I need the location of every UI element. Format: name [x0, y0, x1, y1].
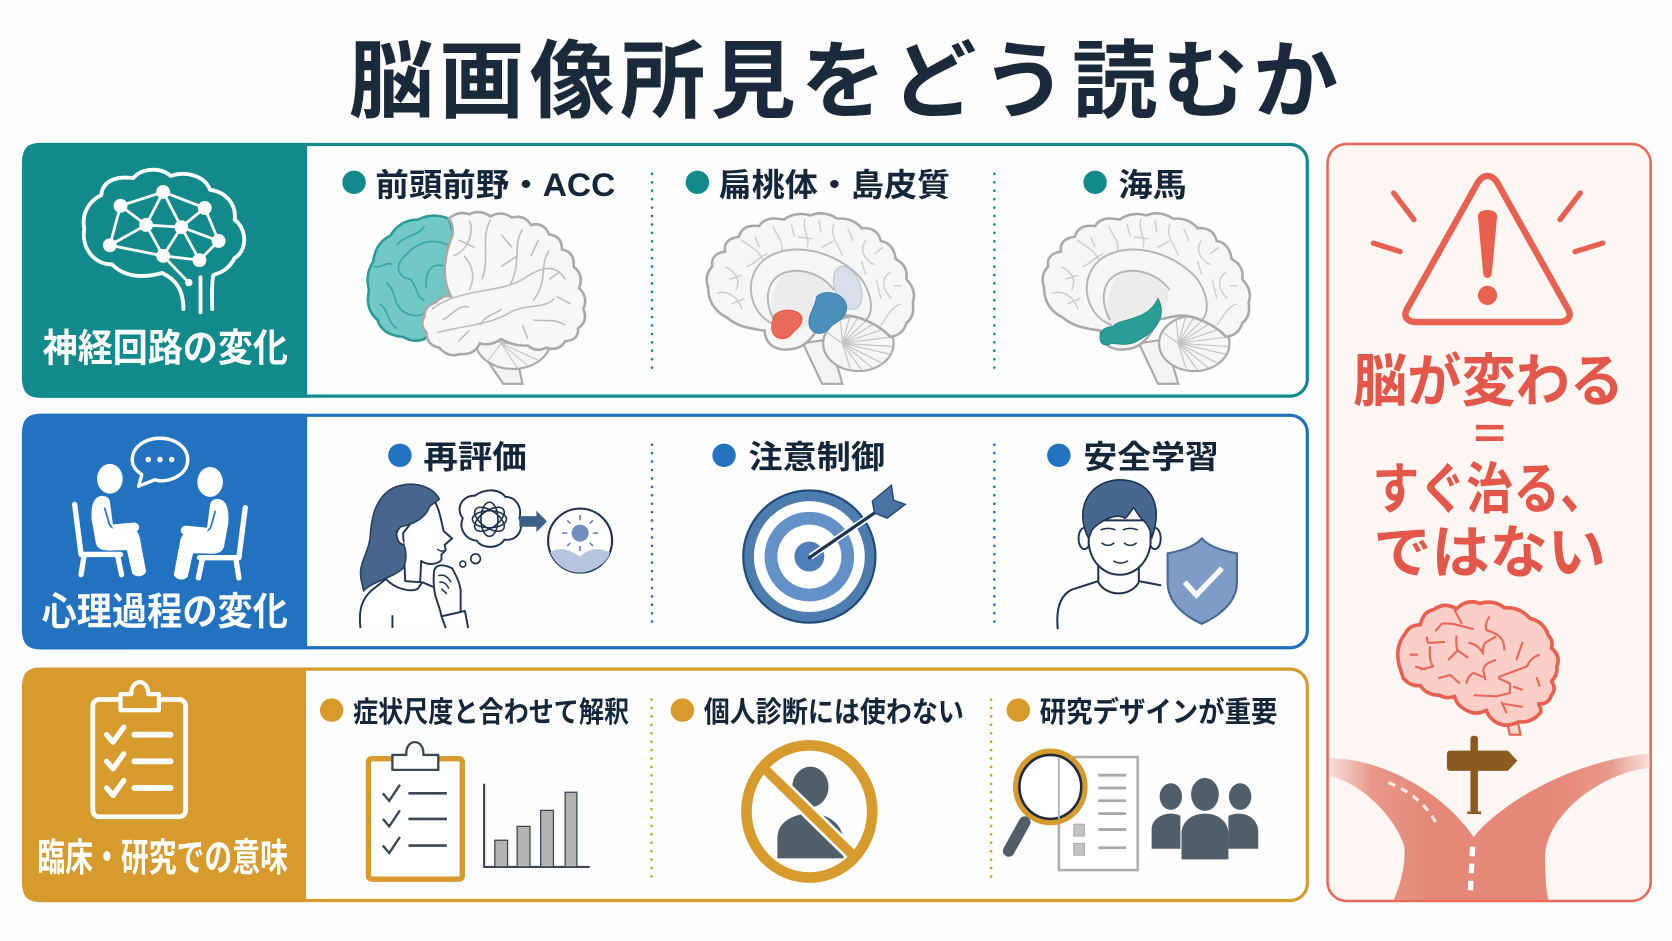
header label: 神経回路の変化: [43, 327, 288, 370]
header label: 心理過程の変化: [42, 591, 288, 634]
divider: [652, 699, 991, 880]
item: 海馬: 海馬: [1119, 167, 1187, 203]
illustration: target and arrow: [743, 485, 905, 623]
item: 研究デザインが重要: [1007, 696, 1277, 870]
item: 症状尺度と合わせて解釈: [320, 697, 629, 879]
item: 前頭前野・ACC: 前頭前野・ACC: [375, 167, 615, 203]
illustration: lateral brain with frontal lobe highlighted: [368, 212, 585, 384]
warning message: 脳が変わる: [1353, 350, 1624, 414]
item: 注意制御: [712, 439, 905, 623]
item: 再評価: 再評価: [423, 439, 527, 475]
item: 扁桃体・島皮質: 扁桃体・島皮質: [719, 167, 950, 203]
illustration: calm person with shield: [1057, 480, 1237, 629]
panel: 心理過程の変化: [22, 414, 1307, 649]
illustration: magnifier over document with group: [1009, 752, 1258, 870]
icon: checklist clipboard: [93, 682, 186, 817]
panel header: 神経回路の変化: [22, 143, 307, 398]
panel header: 臨床・研究での意味: [22, 667, 306, 902]
warning message: =: [1474, 409, 1506, 457]
item: 安全学習: 安全学習: [1083, 439, 1219, 475]
warning message: [1353, 350, 1624, 586]
panel: warning callout: [1328, 144, 1651, 901]
icon: pink brain: [1398, 602, 1558, 735]
illustration: no-person sign: [746, 745, 872, 878]
icon: warning triangle: [1373, 176, 1603, 322]
header label: 臨床・研究での意味: [37, 837, 288, 880]
icon: two people talking: [75, 438, 245, 579]
panel: 神経回路の変化: [22, 143, 1307, 398]
warning message: ではない: [1373, 522, 1606, 586]
icon: signpost: [1447, 736, 1517, 814]
illustration: brain with hippocampus: [1043, 213, 1250, 384]
illustration: clipboard and bar chart: [368, 742, 590, 879]
item: 症状尺度と合わせて解釈: 症状尺度と合わせて解釈: [353, 697, 629, 729]
title: 脳画像所見をどう読むか: [349, 35, 1338, 130]
warning message: すぐ治る、: [1372, 459, 1607, 521]
item: 前頭前野・ACC: [342, 167, 615, 384]
icon: brain network: [84, 170, 244, 312]
item: 海馬: [1043, 167, 1250, 384]
item: 個人診断には使わない: [671, 697, 964, 878]
item: 扁桃体・島皮質: [686, 167, 950, 384]
item: 安全学習: [1047, 439, 1237, 629]
panel header: 心理過程の変化: [22, 414, 307, 649]
illustration: forked road: [1330, 754, 1650, 900]
divider: [652, 174, 994, 371]
illustration: woman reappraising thoughts: [360, 484, 612, 628]
item: 再評価: [360, 439, 612, 628]
panel: 臨床・研究での意味: [22, 667, 1307, 902]
item: 注意制御: 注意制御: [749, 439, 885, 475]
item: 研究デザインが重要: 研究デザインが重要: [1040, 696, 1277, 729]
item: 個人診断には使わない: 個人診断には使わない: [704, 697, 964, 729]
illustration: brain with amygdala and insula: [707, 213, 914, 384]
divider: [652, 445, 994, 624]
